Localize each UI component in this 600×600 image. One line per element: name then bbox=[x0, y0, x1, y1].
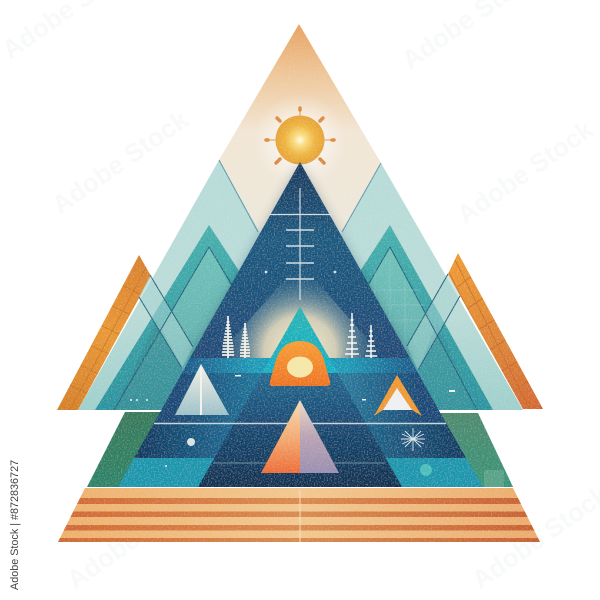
panel: left green band bbox=[87, 412, 172, 487]
icon: left white dot bbox=[187, 438, 195, 446]
faint stock watermarks: Adobe Stock bbox=[451, 114, 599, 230]
icon: snowflake bbox=[401, 428, 425, 451]
icon: pine tree 3 bbox=[345, 313, 359, 358]
icon: white tent triangle bbox=[175, 364, 229, 415]
panel: navy pyramid lower rows bbox=[118, 358, 483, 487]
panel: left orange triangle bbox=[57, 250, 165, 410]
panel: left teal mountain bbox=[95, 225, 330, 410]
decorative mountain ridge lines bbox=[219, 160, 381, 232]
panel: right teal mountain bbox=[270, 225, 493, 410]
icon: pine tree 4 bbox=[365, 325, 377, 358]
panel: right pale mountain bbox=[240, 163, 523, 410]
small sparkle marks bbox=[130, 375, 455, 467]
panel: navy pyramid upper with glow bbox=[189, 162, 411, 362]
icon: sun bbox=[254, 94, 346, 186]
panel: teal apex triangle bbox=[262, 307, 338, 373]
icon: orange outlined tent bbox=[374, 375, 422, 416]
panel: right green band bbox=[430, 413, 513, 487]
panel: top beige peak bbox=[219, 24, 381, 300]
panel: right orange triangle bbox=[448, 253, 543, 409]
vertical credit text: Adobe Stock | #872836727 bbox=[9, 460, 21, 590]
panel: central split triangle bbox=[261, 400, 339, 473]
panel: front dark triangle bbox=[198, 307, 402, 487]
faint stock watermarks: Adobe Stock bbox=[61, 479, 209, 595]
faint stock watermarks: Adobe Stock bbox=[46, 104, 194, 220]
icon: pine tree 2 bbox=[240, 323, 250, 358]
icon: orange dome with yellow sun bbox=[270, 341, 330, 386]
icon: pine tree 1 bbox=[222, 316, 234, 358]
panel: left pale mountain bbox=[78, 160, 360, 410]
panel: bottom striped sand band bbox=[50, 488, 550, 542]
layered triangle artwork bbox=[50, 24, 550, 542]
icon: central ladder mast bbox=[265, 188, 336, 300]
horizontal light lines bbox=[154, 424, 446, 463]
icon: teal dot bbox=[420, 464, 432, 476]
